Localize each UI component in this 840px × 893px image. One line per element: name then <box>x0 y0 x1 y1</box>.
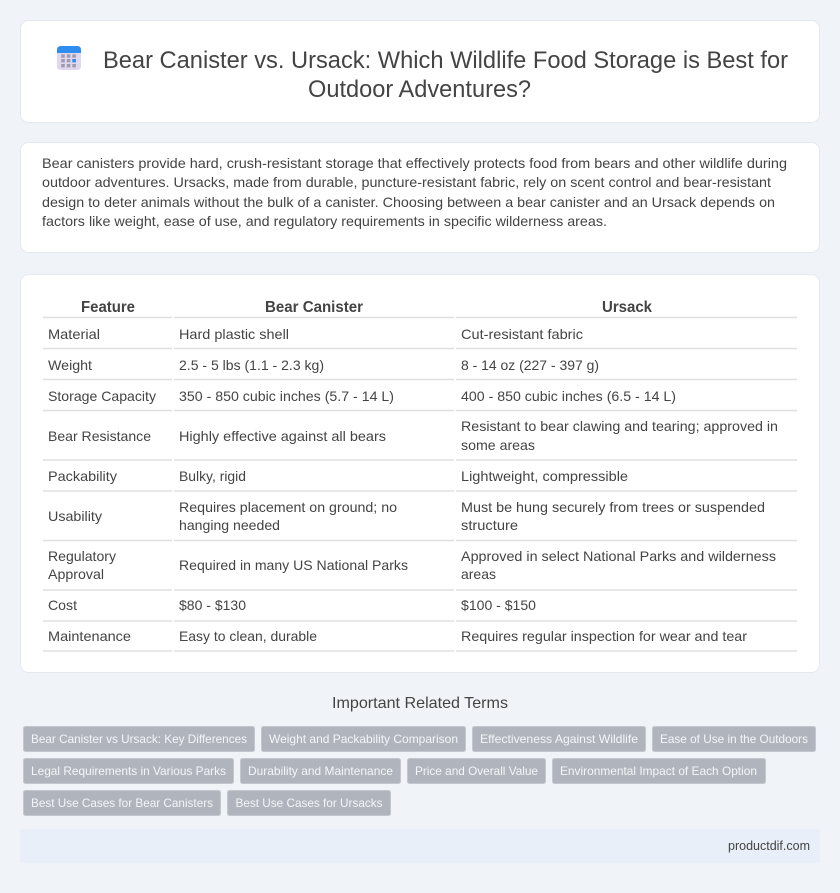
row: cost: $100 - $150 <box>461 597 536 613</box>
row: storage capacity: 350 - 850 cubic inches (5.7 - 14 L) <box>179 388 394 404</box>
tag: Weight and Packability Comparison <box>269 732 458 746</box>
row: cost <box>48 597 536 613</box>
row: regulatory approval: Regulatory <box>48 548 116 564</box>
text block: intro: factors like weight, ease of use, and regulatory requirements in specific wilderness areas. <box>42 213 607 229</box>
row: storage capacity: Storage Capacity <box>48 388 156 404</box>
title <box>103 47 788 103</box>
tag <box>408 758 546 784</box>
tag <box>552 758 766 784</box>
row: cost: $80 - $130 <box>179 597 246 613</box>
icon: calendar <box>57 46 81 70</box>
table header row: Bear Canister <box>265 299 363 316</box>
tag: Best Use Cases for Bear Canisters <box>31 796 213 810</box>
tag: Bear Canister vs Ursack: Key Differences <box>31 732 247 746</box>
row: weight: 2.5 - 5 lbs (1.1 - 2.3 kg) <box>179 357 324 373</box>
panel: comparison table <box>20 274 820 672</box>
row: bear resistance: some areas <box>461 437 535 453</box>
row: bear resistance: Resistant to bear clawing and tearing; approved in <box>461 418 778 434</box>
text block: intro: design to deter animals without the bulk of a canister. Choosing between a bear canister and an Ursack depends on <box>42 194 775 210</box>
tag <box>240 758 400 784</box>
row: bear resistance: Bear Resistance <box>48 428 151 444</box>
tag <box>262 726 466 752</box>
tag <box>228 790 390 816</box>
tag: Best Use Cases for Ursacks <box>236 796 382 810</box>
row: packability: Packability <box>48 468 117 484</box>
row: regulatory approval: Approved in select National Parks and wilderness <box>461 548 776 564</box>
row: usability <box>48 499 765 533</box>
tag <box>24 790 220 816</box>
row: packability: Lightweight, compressible <box>461 468 628 484</box>
row: maintenance <box>48 628 747 644</box>
row: usability: Usability <box>48 508 102 524</box>
row: weight <box>48 357 599 373</box>
row: weight: 8 - 14 oz (227 - 397 g) <box>461 357 599 373</box>
row: storage capacity <box>48 388 676 404</box>
text block: intro: outdoor adventures. Ursacks, made from durable, puncture-resistant fabric, rely on scent control and bear-resistant <box>42 174 771 190</box>
row: usability: Must be hung securely from trees or suspended <box>461 499 765 515</box>
tag: Legal Requirements in Various Parks <box>31 764 226 778</box>
text block: intro: Bear canisters provide hard, crush-resistant storage that effectively protects food from bears and other wildlife during <box>42 155 787 171</box>
row: packability <box>48 468 628 484</box>
tag: Environmental Impact of Each Option <box>560 764 757 778</box>
tag: Price and Overall Value <box>415 764 538 778</box>
row: bear resistance <box>48 418 778 453</box>
row: maintenance: Maintenance <box>48 628 131 644</box>
row: maintenance: Requires regular inspection for wear and tear <box>461 628 747 644</box>
row: weight: Weight <box>48 357 92 373</box>
table header row <box>81 299 652 316</box>
row: material: Material <box>48 326 100 342</box>
row: storage capacity: 400 - 850 cubic inches (6.5 - 14 L) <box>461 388 676 404</box>
row: regulatory approval: Required in many US National Parks <box>179 557 408 573</box>
title: Outdoor Adventures? <box>308 76 531 103</box>
table header row: Feature <box>81 299 135 316</box>
row: usability: Requires placement on ground; no <box>179 499 397 515</box>
panel: intro paragraph <box>20 142 820 252</box>
tag: Durability and Maintenance <box>248 764 393 778</box>
row: regulatory approval: Approval <box>48 566 104 582</box>
tag <box>652 726 816 752</box>
panel: title header <box>20 20 820 122</box>
row: usability: hanging needed <box>179 517 280 533</box>
tag <box>24 726 254 752</box>
row: regulatory approval <box>48 548 776 582</box>
table header row: Ursack <box>602 299 652 316</box>
row: usability: structure <box>461 517 518 533</box>
tag <box>472 726 646 752</box>
text block: intro <box>42 155 787 229</box>
panel: related term tags <box>24 726 816 816</box>
tag <box>24 758 234 784</box>
tag: Ease of Use in the Outdoors <box>660 732 808 746</box>
row: material: Cut-resistant fabric <box>461 326 583 342</box>
row: cost: Cost <box>48 597 77 613</box>
row: packability: Bulky, rigid <box>179 468 246 484</box>
row: maintenance: Easy to clean, durable <box>179 628 317 644</box>
row: material <box>48 326 583 342</box>
row: bear resistance: Highly effective against all bears <box>179 428 386 444</box>
tag: Effectiveness Against Wildlife <box>480 732 638 746</box>
footer bar <box>20 829 820 863</box>
heading: related terms: Important Related Terms <box>332 695 508 712</box>
row: regulatory approval: areas <box>461 566 496 582</box>
title: Bear Canister vs. Ursack: Which Wildlife Food Storage is Best for <box>103 47 788 74</box>
row: material: Hard plastic shell <box>179 326 289 342</box>
footer bar: productdif.com <box>728 839 810 853</box>
